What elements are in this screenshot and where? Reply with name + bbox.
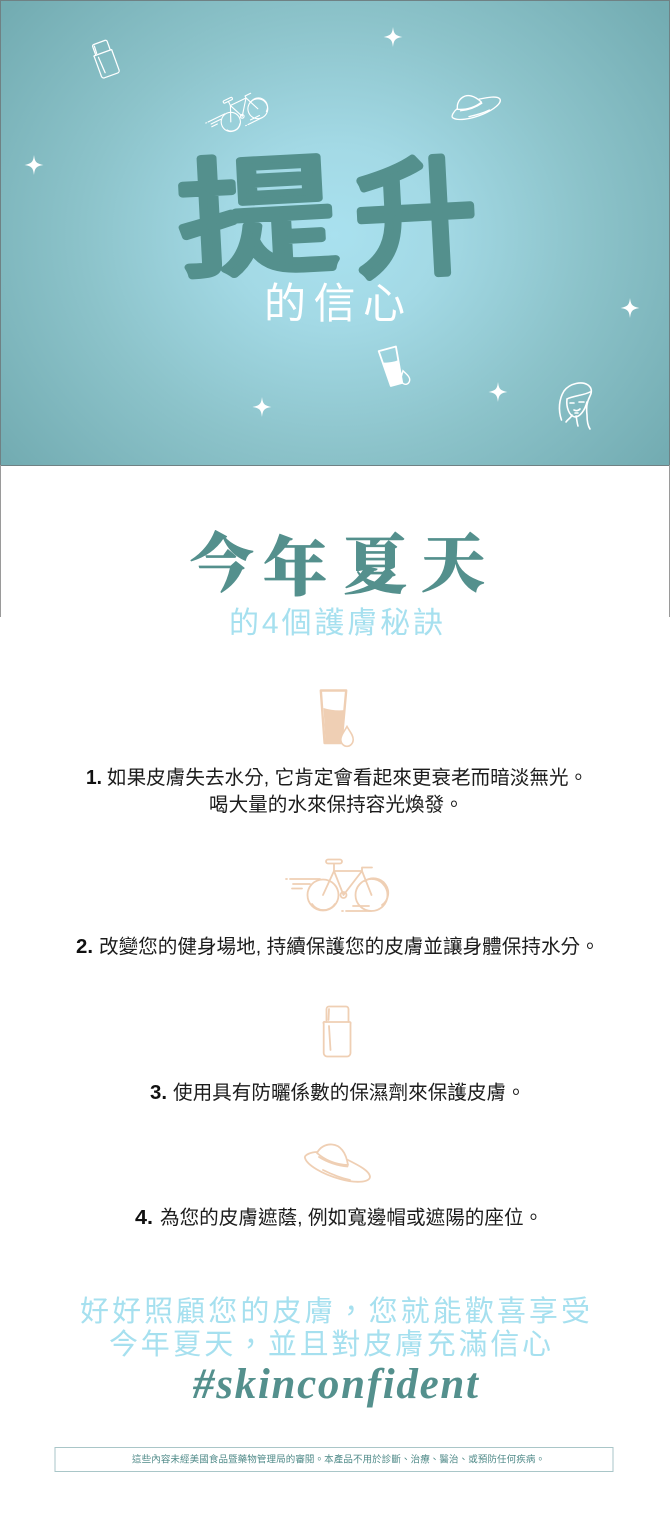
- side frame lines: [0, 465, 670, 617]
- closing message: 好好照顧您的皮膚，您就能歡喜享受: [80, 1295, 590, 1328]
- tip 1: [86, 690, 588, 816]
- disclaimer box: [55, 1448, 613, 1472]
- icon: sun hat: [305, 1144, 370, 1182]
- hero title: calligraphy: [174, 144, 481, 295]
- disclaimer box: 這些內容未經美國食品暨藥物管理局的審閱。本產品不用於診斷、治療、醫治、或預防任何疾病。: [132, 1454, 545, 1466]
- hero title: calligraphy: 升: [351, 146, 481, 295]
- subtitle: four tips: 的4個護膚秘訣: [229, 607, 443, 640]
- tip 3 text: 3.: [150, 1082, 167, 1104]
- section title: [190, 513, 485, 640]
- hero subtitle: 的信心: [264, 280, 405, 327]
- tip 4 text: 4.: [135, 1207, 153, 1229]
- icon: sunscreen bottle: [90, 39, 120, 79]
- title: calligraphy this summer: 天: [421, 513, 485, 605]
- tip 4 text: 為您的皮膚遮蔭, 例如寬邊帽或遮陽的座位。: [160, 1207, 543, 1229]
- tip 3 text: 使用具有防曬係數的保濕劑來保護皮膚。: [173, 1082, 526, 1104]
- tip 2 text: 改變您的健身場地, 持續保護您的皮膚並讓身體保持水分。: [99, 936, 600, 958]
- tip 1 text: [86, 767, 588, 816]
- hero title: calligraphy: 提: [174, 144, 342, 295]
- icon: sparkle stars: [24, 27, 640, 417]
- closing message: [80, 1295, 590, 1361]
- icon: glass of water: [321, 690, 353, 746]
- icon: bicycle: [286, 860, 388, 911]
- title: calligraphy this summer: 年: [263, 517, 327, 609]
- tip 2 text: 2.: [76, 936, 93, 958]
- hashtag: #skinconfident: [192, 1361, 480, 1408]
- hero panel: [0, 0, 670, 466]
- icon: glass of water: [379, 345, 411, 389]
- tip 1 text: 如果皮膚失去水分, 它肯定會看起來更衰老而暗淡無光。: [107, 767, 588, 789]
- tip 1 text: 1.: [86, 767, 102, 789]
- icon: woman's face: [559, 383, 591, 429]
- title: calligraphy this summer: 今: [190, 513, 254, 605]
- closing message: 今年夏天，並且對皮膚充滿信心: [109, 1328, 551, 1361]
- tip 1 text: 喝大量的水來保持容光煥發。: [209, 794, 464, 816]
- tip 3: [150, 1006, 526, 1104]
- icon: bicycle: [201, 84, 271, 141]
- icon: sun hat: [446, 80, 502, 132]
- title: calligraphy this summer: [190, 513, 485, 609]
- hero background: [0, 0, 670, 466]
- tip 4: [135, 1144, 543, 1229]
- tip 2: [76, 860, 600, 958]
- title: calligraphy this summer: 夏: [343, 515, 407, 607]
- icon: sunscreen bottle: [323, 1006, 351, 1056]
